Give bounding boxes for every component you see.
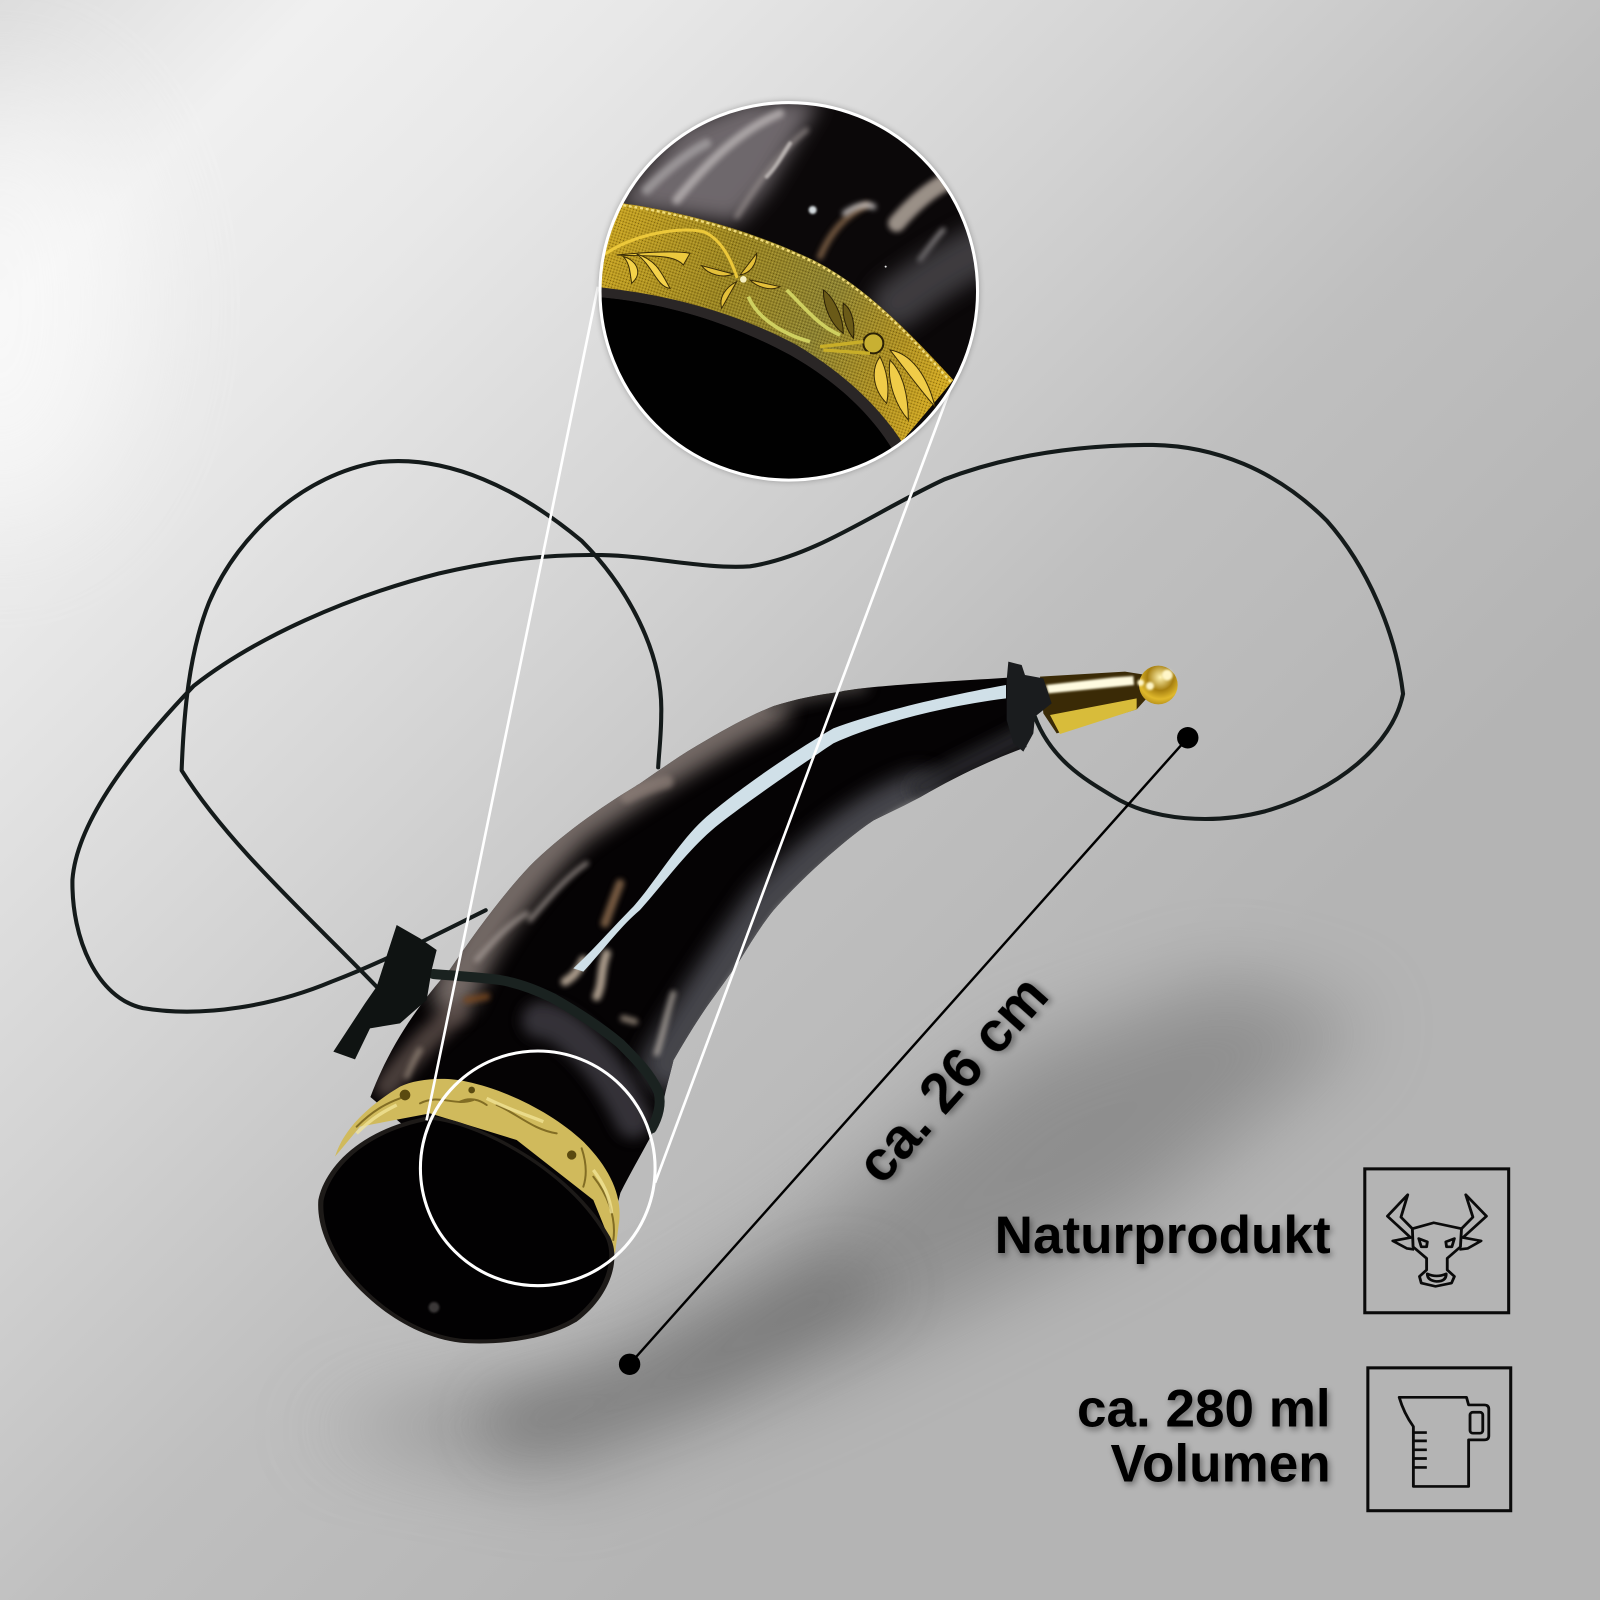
horn marbling bbox=[613, 100, 980, 303]
small detail circle on the horn rim bbox=[420, 1051, 655, 1286]
label: volume: ca. 280 ml bbox=[1077, 1380, 1331, 1439]
leather knot bbox=[333, 925, 437, 1059]
connector left bbox=[427, 287, 598, 1120]
cord: left upper loop bbox=[182, 461, 661, 990]
icon: measuring jug bbox=[1399, 1397, 1489, 1486]
brass tube bbox=[1040, 672, 1147, 733]
dimension line bbox=[619, 727, 1198, 1375]
feature: volume bbox=[1077, 1368, 1511, 1511]
opening edge bbox=[593, 287, 902, 448]
leather strap and knot bbox=[333, 925, 660, 1128]
engraved leaves bbox=[606, 230, 935, 420]
brass shine bbox=[1046, 676, 1134, 693]
horn mouth with gold band, drawn in crop units bbox=[318, 1079, 620, 1343]
brass ball bbox=[1139, 666, 1178, 704]
outer rim bbox=[318, 1116, 614, 1343]
drop shadow of the horn on the backdrop bbox=[306, 980, 1367, 1480]
cord: long loop to the mouthpiece bbox=[72, 445, 1403, 1012]
magnifier connector lines bbox=[427, 287, 950, 1183]
magnified detail circle bbox=[593, 100, 980, 497]
ornament dots bbox=[400, 1087, 576, 1160]
opening black bbox=[602, 298, 892, 478]
mouthpiece, drawn in crop units bbox=[1007, 662, 1178, 752]
inner opening bbox=[323, 1120, 609, 1339]
drinking horn bbox=[318, 662, 1178, 1343]
neck cord bbox=[72, 445, 1403, 1012]
band highlights bbox=[357, 1098, 612, 1213]
ball glints bbox=[1137, 670, 1173, 690]
serrated band edge bbox=[623, 205, 951, 382]
band engraving bbox=[357, 1098, 614, 1240]
feature: natural product bbox=[995, 1169, 1509, 1313]
dimension label: ca. 26 cm bbox=[844, 963, 1060, 1195]
label: volume: Volumen bbox=[1111, 1435, 1331, 1494]
lower horn streaks bbox=[387, 997, 633, 1120]
gold band bbox=[593, 203, 953, 442]
tip knot bbox=[1007, 662, 1052, 752]
strap around the horn bbox=[433, 974, 660, 1128]
icon box bbox=[1365, 1169, 1509, 1313]
speck inside mouth bbox=[429, 1302, 439, 1313]
brass lower reflection bbox=[1050, 698, 1137, 734]
connector right bbox=[655, 390, 950, 1183]
magnified contents bbox=[593, 100, 980, 497]
horn marbling and sheen bbox=[387, 685, 1073, 1120]
icon: bull head bbox=[1387, 1195, 1486, 1286]
gold rim band bbox=[335, 1079, 620, 1253]
glossy highlight bbox=[573, 685, 1006, 972]
icon box bbox=[1368, 1368, 1511, 1511]
horn body bbox=[370, 678, 1027, 1265]
gold band mesh bbox=[593, 203, 953, 442]
label: Naturprodukt: Naturprodukt bbox=[995, 1206, 1331, 1265]
